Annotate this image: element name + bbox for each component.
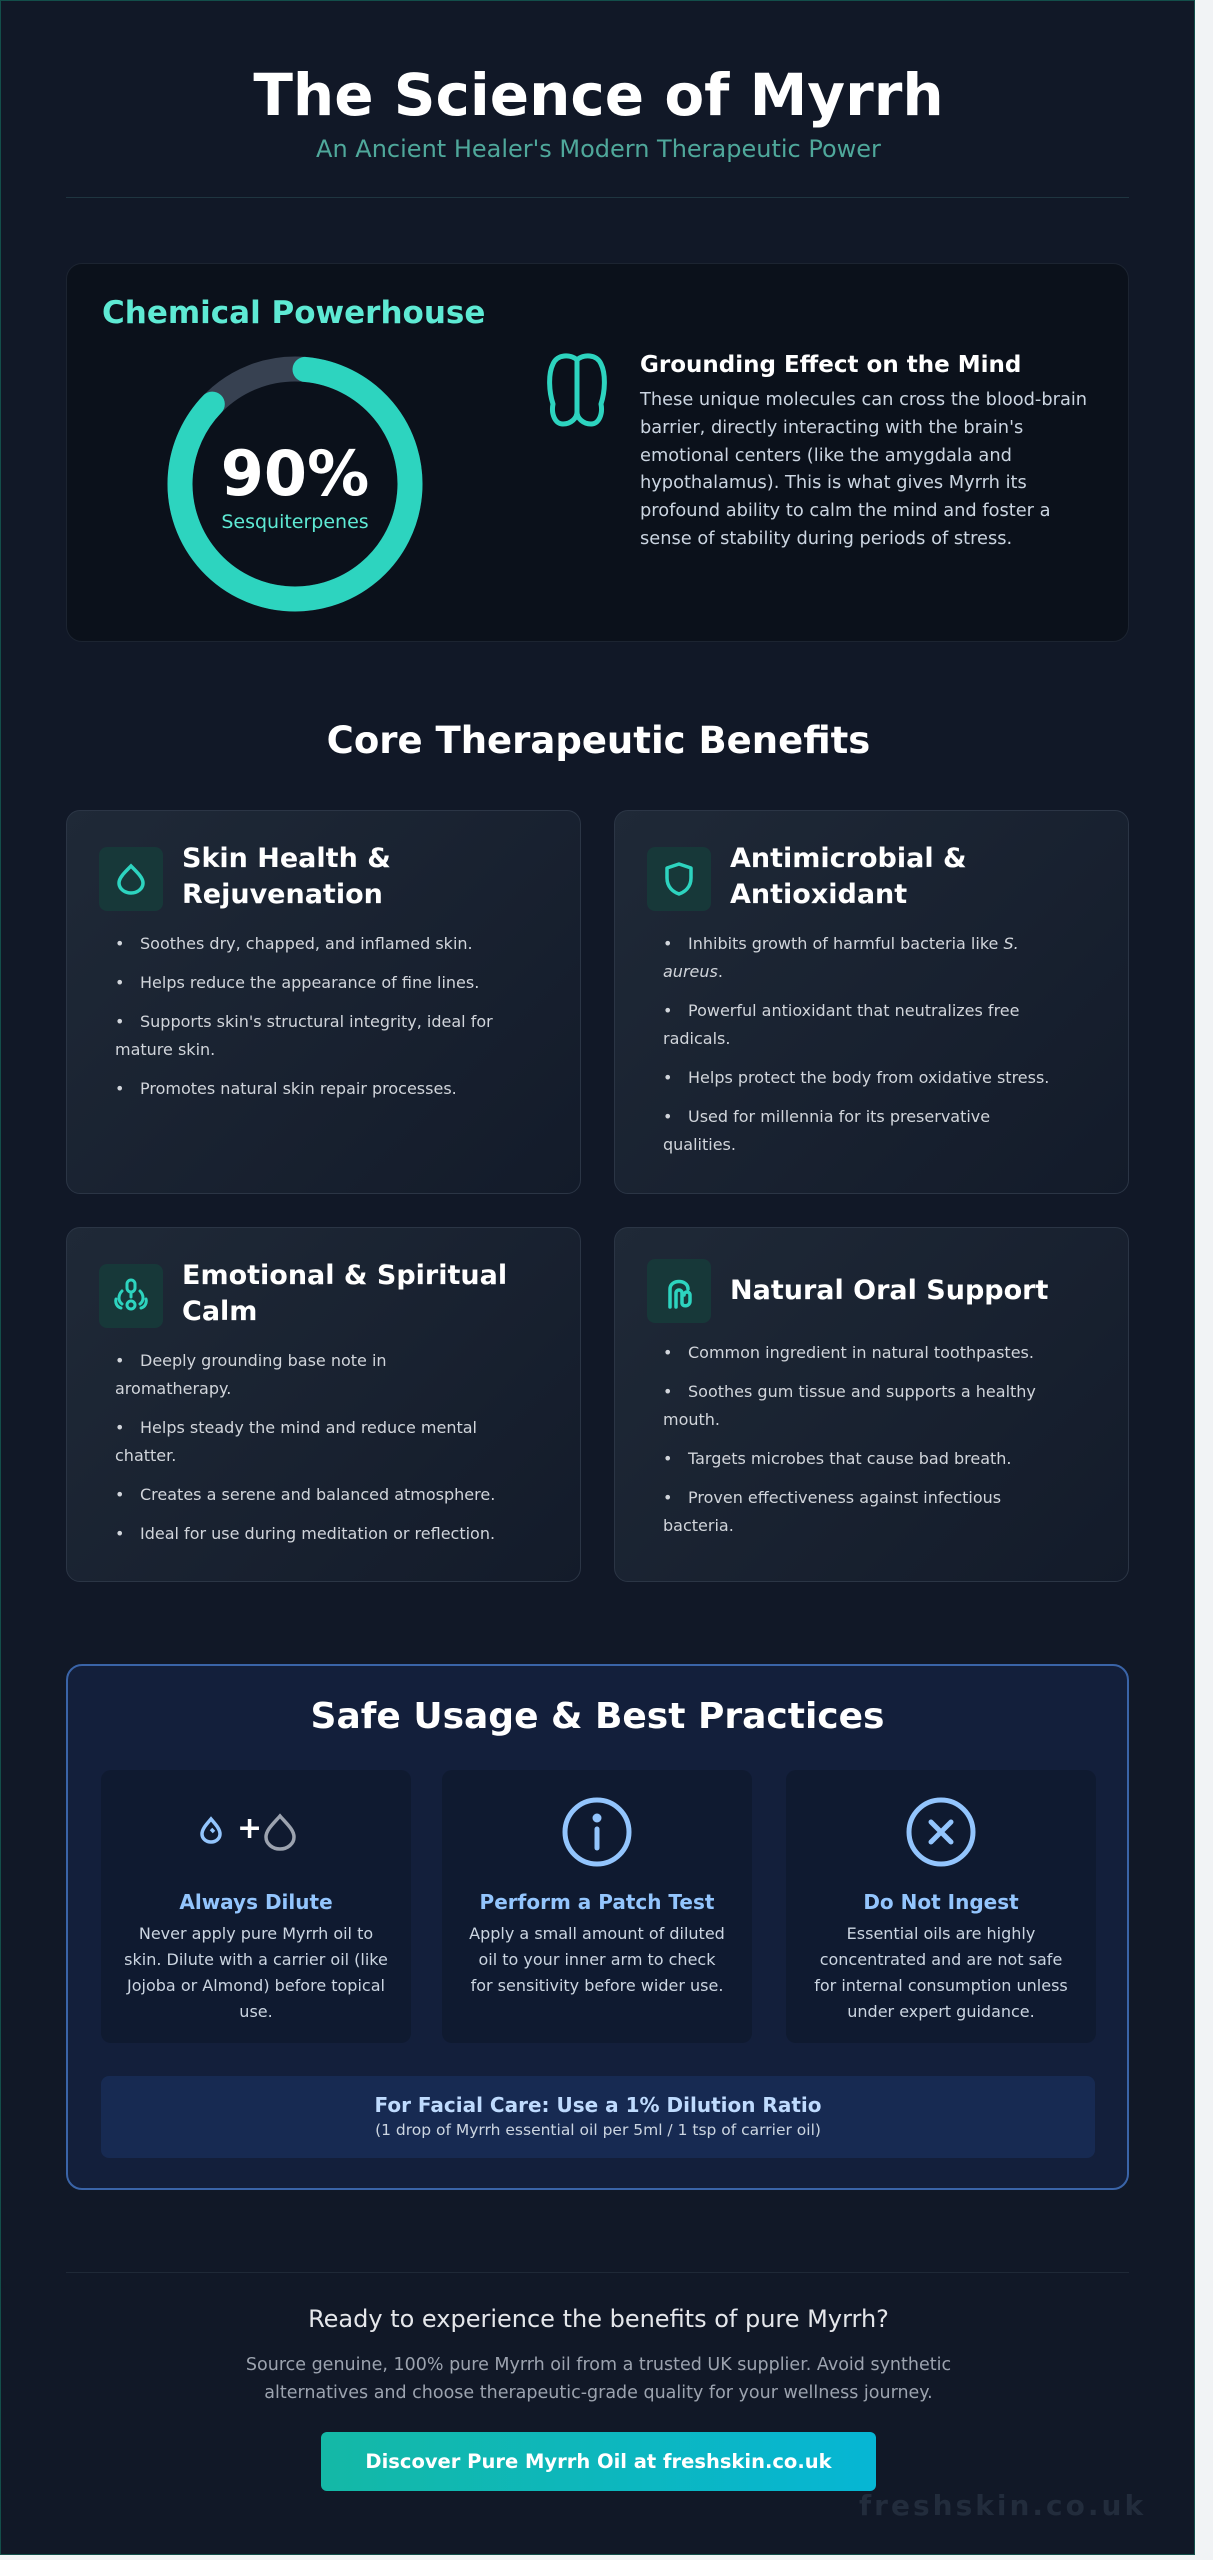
bullet list: mature skin. — [115, 1040, 215, 1059]
card: do not ingest: for internal consumption unless — [814, 1976, 1068, 1995]
icon: tooth — [647, 1259, 711, 1323]
bullet list — [663, 1343, 1036, 1535]
card: always dilute: Always Dilute — [179, 1890, 333, 1914]
bullet list: Promotes natural skin repair processes. — [140, 1079, 457, 1098]
card title: Calm — [182, 1296, 257, 1327]
bullet list: radicals. — [663, 1029, 730, 1048]
text: grounding description: These unique molecules can cross the blood-brain barrier, directly interacting with the brain's emotional centers (like the amygdala and hypothalamus). This is what gives Myrrh its profound ability to calm the mind and foster a sense of stability during periods of stress. — [640, 389, 1087, 549]
bullet list: Helps protect the body from oxidative stress. — [688, 1068, 1049, 1087]
icon: lotus — [99, 1264, 163, 1328]
card: do not ingest: under expert guidance. — [847, 2002, 1035, 2021]
subtitle: An Ancient Healer's Modern Therapeutic Power — [316, 135, 881, 163]
bullet list: Helps reduce the appearance of fine lines. — [140, 973, 479, 992]
card: always dilute — [101, 1770, 411, 2043]
icon: info — [562, 1798, 632, 1866]
card: patch test: Perform a Patch Test — [480, 1890, 714, 1914]
heading: Grounding Effect on the Mind: Grounding Effect on the Mind — [640, 352, 1021, 378]
icon: drops — [200, 1811, 296, 1851]
bullet list: Inhibits growth of harmful bacteria like S. — [688, 934, 1019, 953]
callout: facial dilution ratio: For Facial Care: Use a 1% Dilution Ratio — [374, 2093, 822, 2117]
bullet list: Helps steady the mind and reduce mental — [140, 1418, 477, 1437]
card: do not ingest: Do Not Ingest — [863, 1890, 1019, 1914]
card title: Antioxidant — [730, 879, 907, 910]
bullet list: Targets microbes that cause bad breath. — [688, 1449, 1012, 1468]
icon: drops: + — [237, 1811, 262, 1846]
icon: brain — [547, 353, 607, 426]
watermark: freshskin.co.uk — [859, 2489, 1146, 2522]
bullet list: Proven effectiveness against infectious — [688, 1488, 1001, 1507]
card title: Antimicrobial & — [730, 843, 967, 874]
panel: emotional calm — [66, 1227, 581, 1582]
footer heading: Ready to experience the benefits of pure Myrrh? — [308, 2305, 889, 2333]
card title — [182, 843, 391, 910]
card: patch test: for sensitivity before wider use. — [471, 1976, 723, 1995]
bullet list: Powerful antioxidant that neutralizes free — [688, 1001, 1019, 1020]
card: do not ingest — [786, 1770, 1096, 2043]
donut chart: 90% sesquiterpenes: 90% — [221, 437, 369, 510]
panel: chemical powerhouse — [66, 263, 1129, 642]
icon: x circle — [906, 1798, 976, 1866]
bullet list: Deeply grounding base note in — [140, 1351, 387, 1370]
panel: oral support — [614, 1227, 1129, 1582]
bullet list: Supports skin's structural integrity, ideal for — [140, 1012, 493, 1031]
card title: Natural Oral Support — [730, 1275, 1048, 1306]
card: patch test — [442, 1770, 752, 2043]
bullet list: Ideal for use during meditation or reflection. — [140, 1524, 495, 1543]
callout: facial dilution ratio: (1 drop of Myrrh essential oil per 5ml / 1 tsp of carrier oil) — [375, 2121, 821, 2139]
bullet list: qualities. — [663, 1135, 736, 1154]
bullet list: mouth. — [663, 1410, 720, 1429]
bullet list: bacteria. — [663, 1516, 734, 1535]
icon: shield — [647, 847, 711, 911]
bullet list: Common ingredient in natural toothpastes. — [688, 1343, 1034, 1362]
button: CTA — [321, 2432, 876, 2491]
donut chart: 90% sesquiterpenes — [168, 356, 422, 612]
bullet list — [663, 934, 1049, 1154]
card: patch test: Apply a small amount of diluted — [469, 1924, 725, 1943]
panel: safe usage — [66, 1664, 1129, 2190]
donut chart: 90% sesquiterpenes: Sesquiterpenes — [221, 511, 369, 533]
bullet list: chatter. — [115, 1446, 176, 1465]
footer text: Source genuine, 100% pure Myrrh oil from a trusted UK supplier. Avoid synthetic alternatives and choose therapeutic-grade quality for your wellness journey. — [246, 2355, 951, 2403]
card: patch test: oil to your inner arm to check — [478, 1950, 715, 1969]
bullet list: Creates a serene and balanced atmosphere. — [140, 1485, 495, 1504]
icon: drop — [99, 847, 163, 911]
heading: Safe Usage & Best Practices: Safe Usage & Best Practices — [311, 1696, 884, 1737]
bullet list: Soothes gum tissue and supports a healthy — [688, 1382, 1036, 1401]
title: The Science of Myrrh — [253, 61, 944, 129]
heading: Chemical Powerhouse: Chemical Powerhouse — [102, 295, 485, 331]
panel: antimicrobial — [614, 810, 1129, 1194]
heading: Core Therapeutic Benefits: Core Therapeutic Benefits — [327, 719, 870, 762]
bullet list: aromatherapy. — [115, 1379, 231, 1398]
callout: facial dilution ratio — [101, 2076, 1095, 2158]
card title — [730, 843, 967, 910]
card title: Rejuvenation — [182, 879, 383, 910]
card: always dilute: Never apply pure Myrrh oil to skin. Dilute with a carrier oil (like Jojoba or Almond) before topical use. — [124, 1924, 388, 2021]
bullet list — [115, 934, 493, 1098]
card title: Skin Health & — [182, 843, 391, 874]
card title: Emotional & Spiritual — [182, 1260, 507, 1291]
card: do not ingest: concentrated and are not safe — [820, 1950, 1062, 1969]
bullet list — [115, 1351, 495, 1543]
button: CTA: Discover Pure Myrrh Oil at freshskin.co.uk — [365, 2450, 832, 2473]
bullet list: Used for millennia for its preservative — [688, 1107, 990, 1126]
bullet list: Soothes dry, chapped, and inflamed skin. — [140, 934, 473, 953]
bullet list: aureus. — [663, 962, 723, 981]
card title — [182, 1260, 507, 1327]
panel: skin health — [66, 810, 581, 1194]
card: do not ingest: Essential oils are highly — [847, 1924, 1035, 1943]
